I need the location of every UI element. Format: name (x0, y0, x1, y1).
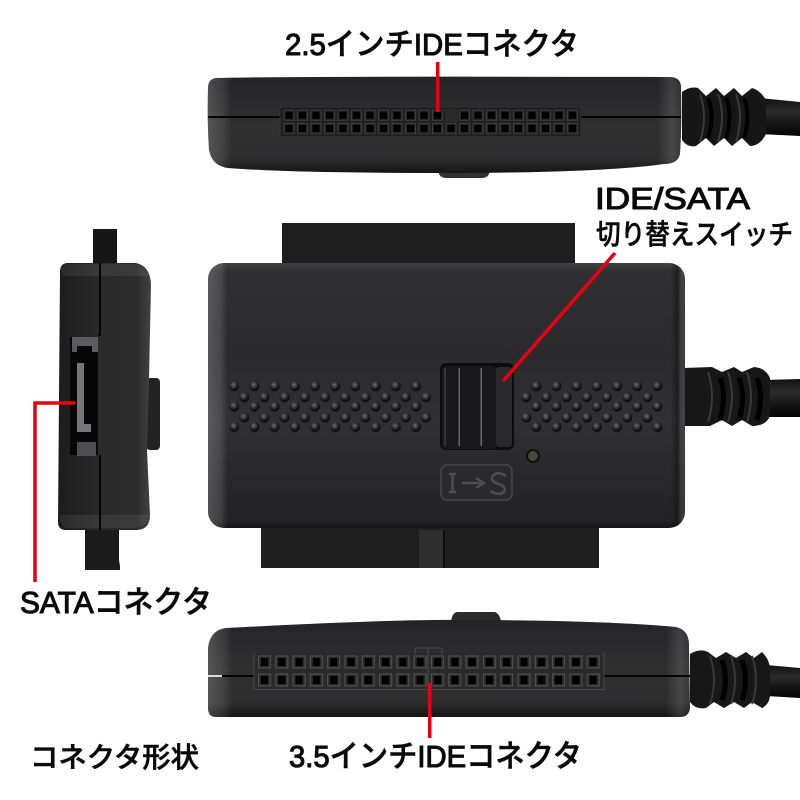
seam (208, 116, 681, 118)
leader line: SATA (35, 403, 75, 582)
label: IDE/SATA switch: IDE/SATA (595, 181, 750, 216)
label: I to S (441, 465, 512, 500)
label: IDE/SATA switch (595, 181, 793, 250)
label: 2.5 inch IDE connector: 2.5インチIDEコネクタ (285, 27, 579, 62)
body (58, 263, 151, 530)
leader line: switch (503, 253, 615, 381)
body top and bottom highlight bands (60, 264, 148, 528)
label: connector shape caption: コネクタ形状 (30, 742, 199, 773)
top tab (451, 612, 501, 622)
dots: left grid (229, 381, 441, 433)
leader line: 2.5 inch IDE (436, 62, 440, 112)
dots: right grid (521, 381, 673, 433)
top tab (93, 229, 117, 265)
bottom tab (439, 166, 489, 178)
strain relief ribs (684, 367, 770, 426)
cable (760, 98, 800, 136)
cable (766, 665, 800, 698)
leader line: 3.5 inch IDE (428, 683, 432, 738)
cable (764, 379, 800, 417)
switch (440, 363, 514, 450)
LED (527, 450, 539, 462)
device: main top view (208, 223, 800, 568)
connector: 3.5 inch (254, 648, 604, 690)
right switch tab (146, 378, 160, 450)
3.5 inch connector bottom (261, 525, 599, 568)
strain relief ribs (682, 88, 766, 146)
connector: 2.5 inch (280, 107, 581, 136)
device: 3.5 inch IDE side view (208, 612, 800, 717)
bottom tab (85, 528, 120, 570)
device: 2.5 inch IDE side view (208, 77, 800, 178)
body (208, 263, 685, 528)
device: SATA side view (58, 229, 160, 570)
label: 3.5 inch IDE connector: 3.5インチIDEコネクタ (289, 739, 582, 774)
body (208, 620, 690, 717)
seam (208, 675, 690, 677)
SATA port (70, 337, 98, 456)
2.5 inch connector top (282, 223, 575, 265)
strain relief ribs (690, 650, 770, 708)
label: SATA connector: SATAコネクタ (20, 585, 212, 620)
body (208, 77, 681, 173)
